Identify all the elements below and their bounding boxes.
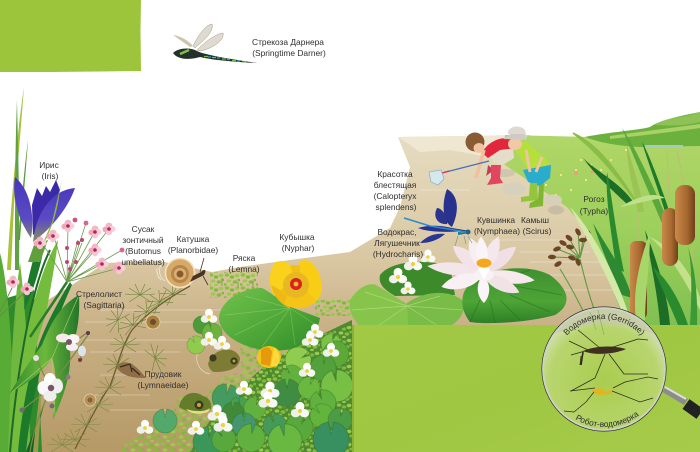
water lily pads right (350, 262, 566, 326)
frog 1 (197, 349, 240, 374)
magnifying glass with water striders (542, 306, 700, 432)
arrowhead leaf of sagittaria (10, 295, 79, 420)
label: hydrocharis: (Hydrocharis) (373, 249, 423, 259)
label: butomus: (Butomus (125, 246, 161, 256)
grass meadow with distant hill (502, 112, 700, 330)
hornwort water plant (47, 277, 190, 452)
label: butomus: Сусак (132, 224, 155, 234)
label: hydrocharis: Лягушечник (374, 238, 420, 248)
nyphar big floating leaf (219, 288, 320, 351)
lens label bottom: Робот-водомерка (576, 412, 639, 428)
pond snail small shells (84, 315, 160, 406)
cattail leaves (570, 128, 700, 325)
label: scirus: (Scirus) (523, 226, 552, 236)
yellow water-lily bud (257, 346, 281, 378)
label: nyphar: (Nyphar) (282, 243, 314, 253)
label: nymphaea: (Nymphaea) (474, 226, 520, 236)
label: butomus: зонтичный (122, 235, 164, 245)
water strider gerridae (569, 330, 648, 391)
top-left green block (0, 0, 141, 72)
water chestnut pads (153, 313, 356, 452)
frog 2 (179, 393, 211, 414)
label: hydrocharis: Водокрас, (377, 227, 417, 237)
girl with net (429, 132, 516, 185)
label: lymnaeidae: Прудовик (145, 369, 182, 379)
iris flower (14, 177, 75, 262)
label: calopteryx: (Calopteryx (374, 191, 417, 201)
butterfly net (429, 161, 489, 185)
label: springtime darner: Стрекоза Дарнера (252, 37, 324, 47)
lens (542, 307, 666, 431)
label: typha: Рогоз (583, 194, 605, 204)
sagittaria flowers (20, 331, 90, 452)
label: planorbidae: Катушка (177, 234, 210, 244)
left reed and leaf mass (0, 240, 72, 452)
label: planorbidae: (Planorbidae) (168, 245, 218, 255)
flowering rush small umbel (0, 276, 34, 316)
iris blades background (7, 87, 28, 270)
label: nyphar: Кубышка (279, 232, 315, 242)
flowering rush umbel (30, 218, 126, 337)
water lily flower (427, 234, 535, 303)
lens label top: Водомерка (Gerridae) (563, 313, 644, 336)
label: springtime darner: (Springtime Darner) (252, 48, 326, 58)
cattail heads (630, 185, 695, 320)
hydrocharis flowers (389, 250, 435, 294)
dragonfly: springtime darner (173, 24, 257, 63)
label: calopteryx: блестящая (374, 180, 416, 190)
nyphar yellow flower (270, 260, 322, 308)
label: nymphaea: Кувшинка (477, 215, 515, 225)
label: butomus: umbellatus) (121, 257, 165, 267)
small white flowers (137, 309, 339, 435)
boy in hat (503, 127, 551, 208)
scirpus reeds (548, 227, 600, 325)
damselfly: calopteryx splendens (404, 189, 472, 246)
label: sagittaria: Стрелолист (76, 289, 122, 299)
pond snail: lymnaeidae (116, 362, 146, 378)
label: lemna: Ряска (233, 253, 256, 263)
label: iris: (Iris) (42, 171, 59, 181)
label: iris: Ирис (39, 160, 59, 170)
sandy pond bed (0, 135, 640, 452)
duckweed and dark pad mass (118, 320, 352, 452)
label: scirus: Камыш (521, 215, 549, 225)
lemna clusters (210, 272, 352, 316)
label: lemna: (Lemna) (228, 264, 260, 274)
label: calopteryx: Красотка (377, 169, 413, 179)
robot water strider (564, 377, 658, 412)
label: sagittaria: (Sagittaria) (84, 300, 125, 310)
pebbles on shore (495, 169, 564, 214)
snail: planorbidae (157, 258, 208, 288)
label: lymnaeidae: (Lymnaeidae) (138, 380, 189, 390)
bottom right green block (352, 325, 700, 452)
handle (664, 387, 700, 414)
label: calopteryx: splendens) (376, 202, 417, 212)
label: typha: (Typha) (580, 206, 608, 216)
